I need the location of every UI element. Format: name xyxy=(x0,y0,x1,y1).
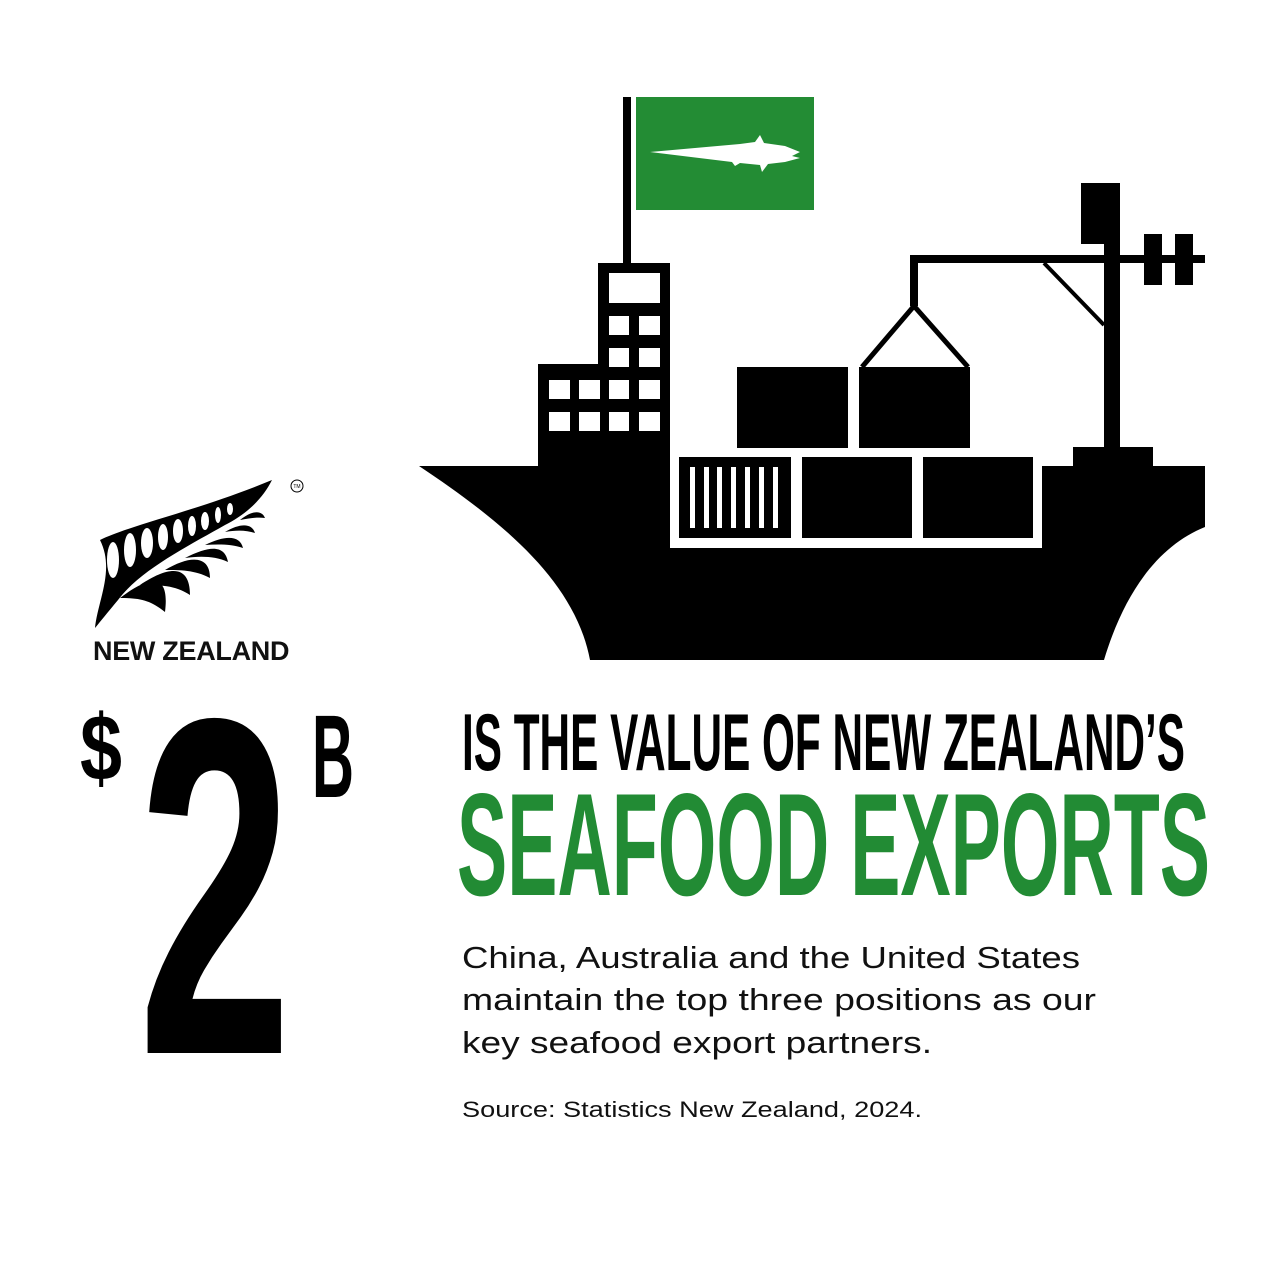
body text and source: key seafood export partners. xyxy=(462,1025,932,1060)
body text and source xyxy=(462,940,1096,1122)
big stat $2B: $ xyxy=(80,695,122,800)
logo: New Zealand fern: TM xyxy=(293,484,301,490)
flag with fish xyxy=(636,97,814,210)
bridge tower xyxy=(538,263,670,474)
fern frond xyxy=(95,480,272,628)
flag mast xyxy=(623,97,631,267)
logo: New Zealand fern xyxy=(93,480,304,666)
containers xyxy=(679,367,1033,538)
hull xyxy=(419,447,1205,660)
headline xyxy=(457,700,1210,900)
body text and source: maintain the top three positions as our xyxy=(462,982,1096,1017)
logo text: NEW ZEALAND xyxy=(93,636,289,666)
body text and source: China, Australia and the United States xyxy=(462,940,1080,975)
crane xyxy=(862,183,1205,448)
body text and source: Source: Statistics New Zealand, 2024. xyxy=(462,1097,922,1122)
